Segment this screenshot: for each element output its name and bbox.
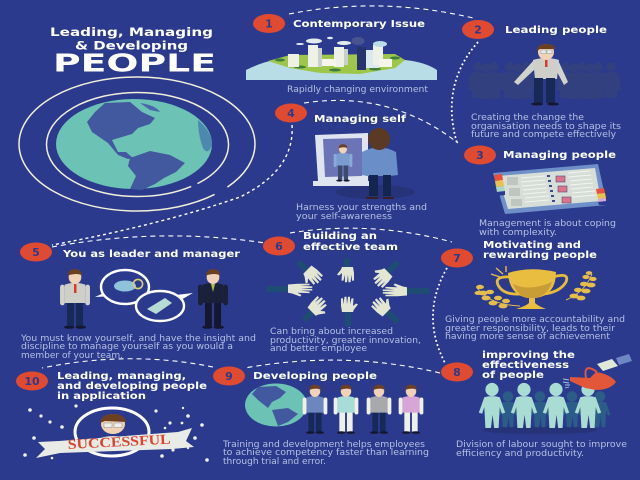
illustration: leader with crowd xyxy=(468,44,621,106)
badge 1 xyxy=(253,14,285,33)
text 9: through trial and error. xyxy=(223,456,326,466)
badge 6 xyxy=(263,236,295,256)
text 8: efficiency and productivity. xyxy=(456,448,584,458)
text 2: Creating the change the xyxy=(471,112,584,122)
badge 10 xyxy=(16,372,48,390)
text 7: Giving people more accountability and xyxy=(445,314,625,324)
illustration: watering people xyxy=(479,354,632,434)
text 8: Division of labour sought to improve xyxy=(456,439,627,449)
badge 7: 7 xyxy=(453,252,461,265)
illustration: circle of hands xyxy=(266,258,430,326)
heading 10: Leading, managing, xyxy=(57,371,186,382)
badge 2: 2 xyxy=(474,24,482,36)
heading 8: effectiveness xyxy=(482,360,569,371)
text 7: greater responsibility, leads to their xyxy=(445,323,616,333)
path: connector 5 to 6 xyxy=(52,236,265,247)
text 4: your self-awareness xyxy=(296,211,392,221)
badge 3 xyxy=(464,146,496,164)
heading 8 xyxy=(482,350,575,381)
badge 9: 9 xyxy=(225,370,233,383)
heading 7: rewarding people xyxy=(483,250,597,261)
icon: globe with rings xyxy=(19,77,255,211)
heading 4: Managing self xyxy=(314,114,407,125)
badge 8: 8 xyxy=(453,366,461,379)
badge 3: 3 xyxy=(476,149,484,162)
path: connector 4 to 3 xyxy=(304,100,458,143)
badge 1: 1 xyxy=(265,18,273,30)
text 1: Rapidly changing environment xyxy=(287,84,429,94)
path: connector 1 to 2 xyxy=(289,6,473,18)
path: connector 7 to 8 xyxy=(433,268,447,363)
badge 2 xyxy=(462,20,494,39)
badge 8 xyxy=(441,362,473,382)
text 3: Management is about coping xyxy=(479,218,616,228)
text 3 xyxy=(479,218,616,237)
heading 6 xyxy=(303,231,398,253)
heading 8: of people xyxy=(482,370,544,381)
text 4: Harness your strengths and xyxy=(296,202,427,212)
path: connector 4 to 5 xyxy=(52,125,292,245)
text 9: Training and development helps employees xyxy=(222,439,425,449)
heading 3: Managing people xyxy=(503,150,616,161)
text 7: having more sense of achievement xyxy=(445,331,611,341)
text 9 xyxy=(222,439,429,466)
badge 5 xyxy=(20,242,52,262)
heading 1: Contemporary Issue xyxy=(293,19,425,30)
title xyxy=(50,25,216,78)
heading 10 xyxy=(57,371,207,402)
text 9: to achieve competency faster than learning xyxy=(223,447,429,457)
heading 2: Leading people xyxy=(505,25,607,36)
heading 10: in application xyxy=(57,391,146,402)
heading 7: Motivating and xyxy=(483,240,581,251)
badge 6: 6 xyxy=(275,240,283,253)
illustration: successful badge: SUCCESSFUL xyxy=(67,433,171,453)
illustration: successful badge xyxy=(23,404,209,462)
heading 7 xyxy=(483,240,597,261)
text 7 xyxy=(445,314,625,341)
text 8 xyxy=(456,439,627,458)
badge 9 xyxy=(213,366,245,386)
heading 6: Building an xyxy=(303,231,377,242)
badge 5: 5 xyxy=(32,246,40,259)
text 6 xyxy=(270,326,421,353)
heading 6: effective team xyxy=(303,242,398,253)
title: Leading, Managing xyxy=(50,25,213,39)
path: connector 6 to 7 xyxy=(290,228,452,242)
text 6: and better employee xyxy=(270,343,367,353)
text 3: with complexity. xyxy=(479,227,557,237)
illustration: trophy and laurels xyxy=(474,266,597,309)
heading 8: improving the xyxy=(482,350,575,361)
text 5: discipline to manage yourself as you would a xyxy=(21,341,233,351)
text 6: Can bring about increased xyxy=(270,326,393,336)
path: connector 8 to 9 xyxy=(245,360,440,373)
heading 10: and developing people xyxy=(57,381,207,392)
text 5 xyxy=(20,333,256,360)
badge 10: 10 xyxy=(24,375,40,388)
text 5: You must know yourself, and have the insight and xyxy=(20,333,256,343)
text 2 xyxy=(471,112,621,139)
text 2: future and compete effectively xyxy=(471,129,616,139)
text 5: member of your team. xyxy=(21,350,123,360)
title: & Developing xyxy=(75,38,188,52)
illustration: globe with four employees xyxy=(245,384,423,434)
heading 9: Developing people xyxy=(253,371,377,382)
badge 4 xyxy=(275,104,307,122)
badge 7 xyxy=(441,248,473,268)
illustration: two managers talking xyxy=(60,269,228,329)
text 2: organisation needs to shape its xyxy=(471,121,621,131)
heading 5: You as leader and manager xyxy=(62,249,240,260)
text 6: productivity, greater innovation, xyxy=(270,335,421,345)
badge 4: 4 xyxy=(287,107,295,120)
path: connector 9 to 10 xyxy=(42,359,213,368)
text 4 xyxy=(296,202,427,221)
illustration: open planner xyxy=(493,164,607,214)
path: connector 2 to 3 xyxy=(452,42,478,143)
title: PEOPLE xyxy=(53,48,216,78)
illustration: city island xyxy=(246,37,437,80)
illustration: man at mirror xyxy=(313,128,415,199)
